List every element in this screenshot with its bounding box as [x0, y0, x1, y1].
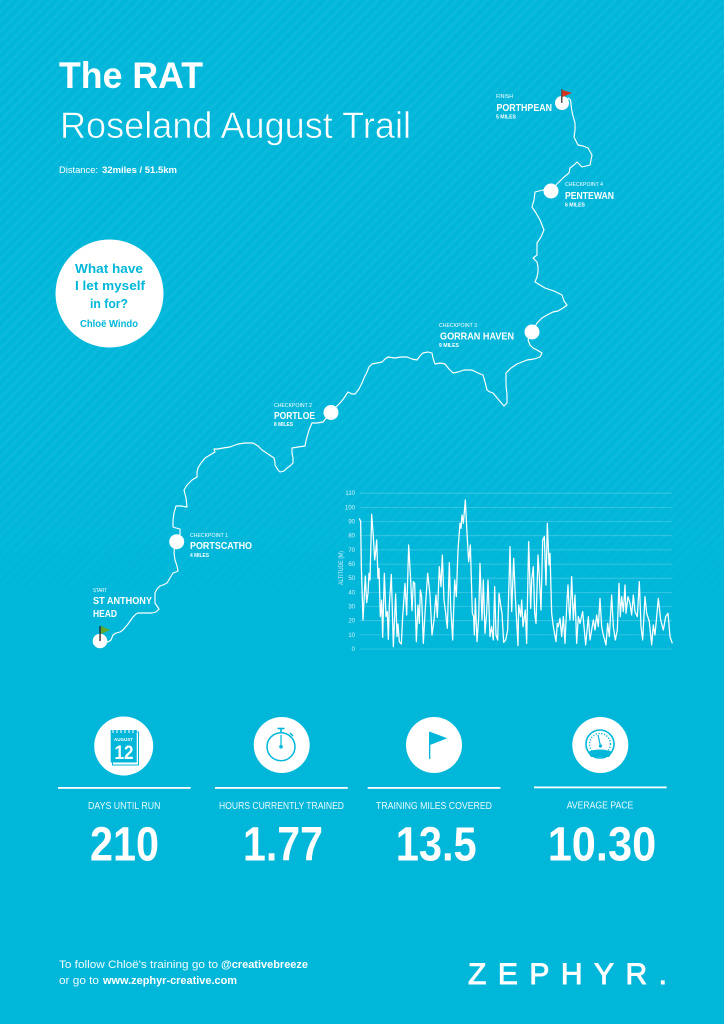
checkpoint 1: Portscatho: 4 MILES — [190, 553, 209, 559]
chart axis labels: 0 — [352, 647, 356, 653]
finish marker: Porthpean: FINISH — [496, 94, 513, 100]
icon: flag — [406, 717, 462, 773]
stat: hours currently trained — [215, 717, 348, 872]
callout: quote circle: in for? — [90, 296, 128, 311]
distance value: 32miles / 51.5km — [102, 165, 177, 176]
icon: stopwatch — [254, 717, 310, 773]
start marker: St Anthony Head: START — [93, 588, 108, 594]
icon: speedometer — [572, 717, 628, 773]
altitude line — [359, 500, 672, 647]
subtitle: Roseland August Trail: Roseland August Trail — [60, 105, 411, 146]
finish marker: Porthpean — [496, 89, 572, 120]
checkpoint 2: Portloe — [274, 403, 338, 428]
footer text — [59, 959, 308, 987]
start marker: St Anthony Head — [93, 588, 152, 648]
stat: days until run: DAYS UNTIL RUN — [88, 801, 160, 812]
footer text: @creativebreeze — [221, 959, 308, 971]
icon: calendar: AUGUST — [114, 737, 133, 742]
checkpoint 2: Portloe: PORTLOE — [274, 410, 315, 422]
stat: days until run: 210 — [90, 818, 159, 872]
checkpoint 3: Gorran Haven: GORRAN HAVEN — [440, 330, 514, 342]
checkpoint 1: Portscatho: CHECKPOINT 1 — [190, 533, 228, 539]
checkpoint 3: Gorran Haven: 9 MILES — [439, 343, 459, 349]
chart axis title: ALTITUDE (M) — [339, 551, 345, 585]
chart axis labels: 90 — [348, 520, 356, 526]
checkpoint 4: Pentewan: 6 MILES — [565, 202, 585, 208]
callout: quote circle: I let myself — [75, 278, 146, 293]
callout: quote circle: Chloë Windo — [80, 319, 138, 330]
stat: training miles covered: TRAINING MILES COVERED — [376, 801, 492, 812]
checkpoint 4: Pentewan: CHECKPOINT 4 — [565, 182, 603, 188]
stat: training miles covered — [368, 717, 500, 872]
chart axis labels: 10 — [348, 633, 356, 639]
stat: hours currently trained: 1.77 — [243, 818, 323, 872]
stat: training miles covered: 13.5 — [396, 818, 477, 872]
start marker: St Anthony Head: ST ANTHONY — [93, 595, 152, 607]
stat: average pace — [534, 717, 667, 872]
title: The RAT: The RAT — [59, 55, 203, 96]
footer text: To follow Chloë's training go to — [59, 959, 218, 971]
chart grid lines — [360, 493, 672, 649]
checkpoint 3: Gorran Haven: CHECKPOINT 3 — [439, 323, 477, 329]
route map line — [100, 98, 592, 642]
footer text: www.zephyr-creative.com — [102, 975, 237, 987]
checkpoint 4: Pentewan: PENTEWAN — [565, 190, 614, 202]
checkpoint 3: Gorran Haven — [439, 323, 540, 349]
checkpoint 4: Pentewan — [544, 182, 614, 208]
stat: days until run — [58, 716, 191, 872]
title block — [59, 55, 411, 176]
checkpoint 1: Portscatho: PORTSCATHO — [190, 540, 252, 552]
chart axis labels — [345, 491, 356, 653]
chart axis labels: 110 — [345, 491, 356, 497]
finish marker: Porthpean: 5 MILES — [496, 114, 516, 120]
stat: average pace: AVERAGE PACE — [567, 800, 634, 812]
chart axis labels: 30 — [348, 605, 356, 611]
chart axis labels: 80 — [348, 534, 356, 540]
altitude chart — [339, 491, 672, 653]
finish marker: Porthpean: PORTHPEAN — [496, 102, 552, 114]
icon: calendar — [94, 716, 153, 776]
chart axis labels: 40 — [348, 590, 356, 596]
chart axis labels: 60 — [348, 562, 356, 568]
logo: ZEPHYR: ZEPHYR. — [468, 958, 667, 991]
chart axis labels: 50 — [348, 576, 356, 582]
checkpoint 1: Portscatho — [169, 533, 252, 559]
stat: average pace: 10.30 — [548, 818, 656, 872]
checkpoint 2: Portloe: CHECKPOINT 2 — [274, 403, 312, 409]
callout: quote circle — [56, 240, 164, 348]
distance label: Distance: — [59, 165, 98, 176]
footer text: or go to — [59, 975, 99, 987]
checkpoint 2: Portloe: 8 MILES — [274, 422, 293, 428]
start marker: St Anthony Head: HEAD — [93, 608, 117, 620]
stat: hours currently trained: HOURS CURRENTLY TRAINED — [219, 801, 344, 812]
icon: calendar: 12 — [114, 743, 134, 764]
chart axis labels: 70 — [348, 548, 356, 554]
chart axis labels: 20 — [348, 619, 356, 625]
chart axis labels: 100 — [345, 505, 356, 511]
callout: quote circle: What have — [75, 261, 143, 276]
